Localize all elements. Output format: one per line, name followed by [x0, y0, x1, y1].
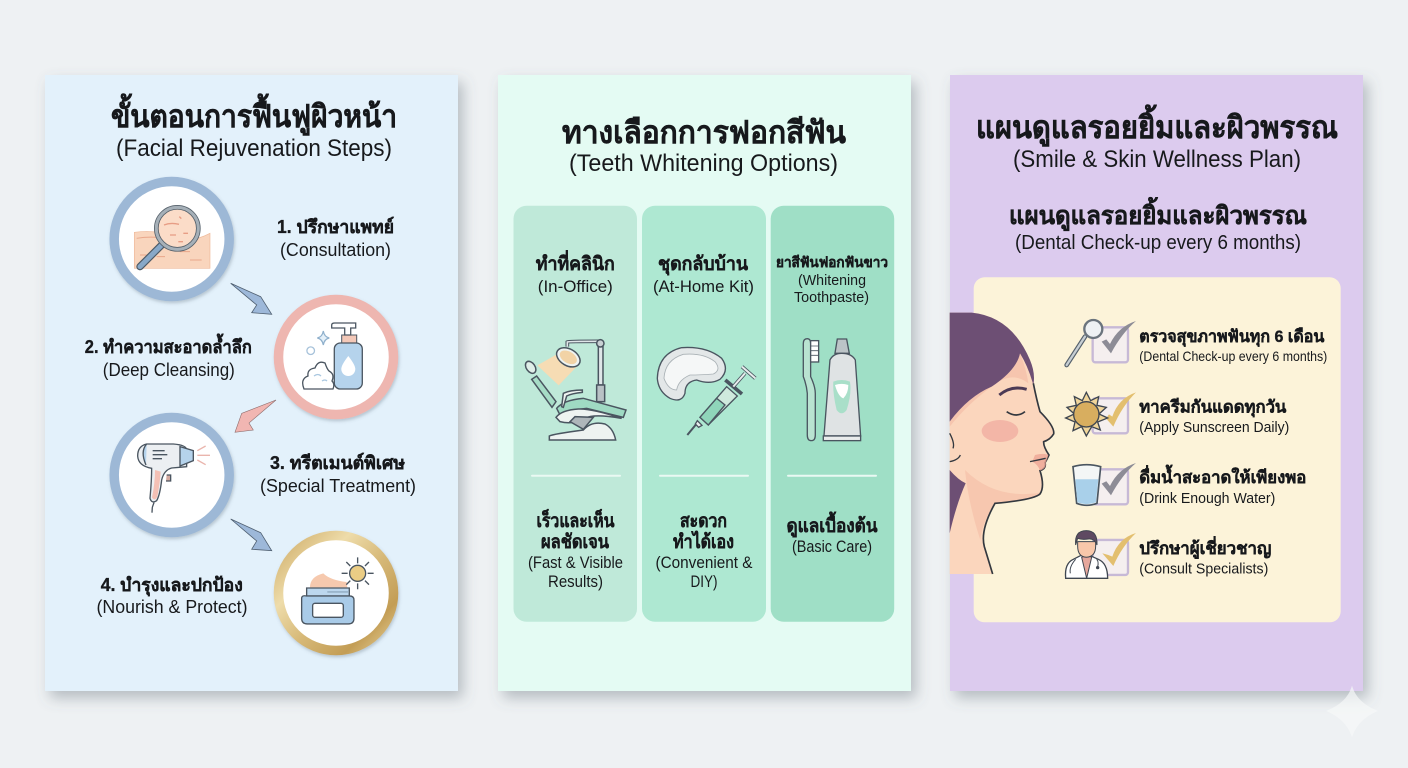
illustration: woman profile [950, 313, 1054, 574]
list item: dental check-up: (Dental Check-up every 6 months) [1139, 348, 1327, 364]
column: in-office: ผลชัดเจน [541, 532, 609, 553]
text: step 4: 4. บำรุงและปกป้อง [101, 575, 243, 597]
list item: sunscreen: ทาครีมกันแดดทุกวัน [1139, 396, 1287, 418]
list item: drink water [1073, 463, 1306, 507]
heading: smile and skin wellness plan: (Smile & Skin Wellness Plan) [1013, 146, 1301, 173]
text: step 3: (Special Treatment) [260, 476, 416, 496]
column: at-home kit: ชุดกลับบ้าน [658, 253, 748, 276]
heading: teeth whitening: ทางเลือกการฟอกสีฟัน [562, 115, 846, 150]
column: at-home kit: (At-Home Kit) [653, 277, 754, 296]
icon: step 3 treatment device [114, 418, 229, 532]
arrow: step 1 to 2 [231, 283, 272, 314]
icon: glass of water with check [1073, 463, 1136, 505]
icon: doctor with check [1065, 531, 1136, 578]
list item: drink water: ดื่มน้ำสะอาดให้เพียงพอ [1139, 464, 1306, 487]
column: in-office: (Fast & Visible [528, 553, 623, 572]
column: whitening toothpaste: Toothpaste) [794, 289, 869, 306]
heading: teeth whitening [562, 115, 846, 177]
column: in-office [514, 206, 637, 622]
icon: sparkle watermark [1328, 688, 1376, 735]
card: wellness checklist [974, 277, 1341, 622]
column: in-office: (In-Office) [538, 277, 613, 296]
text: step 2: 2. ทำความสะอาดล้ำลึก [85, 333, 252, 357]
list item: consult specialists: ปรึกษาผู้เชี่ยวชาญ [1139, 536, 1271, 560]
column: in-office: เร็วและเห็น [536, 508, 614, 532]
arrow: step 3 to 4 [231, 519, 272, 551]
column: in-office: Results) [548, 572, 603, 591]
column: whitening toothpaste: (Whitening [798, 272, 866, 289]
column: whitening toothpaste: ยาสีฟันฟอกฟันขาว [776, 254, 888, 270]
icon: sun with check [1066, 392, 1136, 436]
text: step 4: (Nourish & Protect) [96, 597, 248, 617]
list item: consult specialists [1065, 531, 1271, 578]
column: in-office: ทำที่คลินิก [536, 250, 615, 275]
arrow: step 2 to 3 [235, 400, 276, 432]
panel: smile and skin wellness plan [950, 75, 1363, 691]
column: whitening toothpaste: ดูแลเบื้องต้น [786, 511, 878, 538]
text: step 1 [277, 216, 394, 260]
heading: facial rejuvenation: (Facial Rejuvenation Steps) [116, 135, 392, 162]
icon: step 4 cream jar and sun [278, 536, 394, 650]
text: step 3: 3. ทรีตเมนต์พิเศษ [270, 452, 405, 473]
icon: dental mirror with check [1067, 320, 1136, 365]
list item: sunscreen [1066, 392, 1289, 436]
list item: dental check-up [1067, 320, 1327, 365]
column: at-home kit: (Convenient & [656, 553, 753, 572]
list item: drink water: (Drink Enough Water) [1139, 491, 1275, 507]
text: step 2: (Deep Cleansing) [103, 360, 235, 380]
panel: teeth whitening options [498, 75, 911, 691]
text: step 4 [96, 575, 248, 617]
subheading: dental check-up: แผนดูแลรอยยิ้มและผิวพรรณ [1009, 196, 1307, 232]
column: whitening toothpaste: (Basic Care) [792, 537, 872, 556]
column: whitening toothpaste [771, 206, 894, 622]
heading: smile and skin wellness plan [976, 104, 1338, 173]
text: step 2 [85, 333, 252, 380]
list item: dental check-up: ตรวจสุขภาพฟันทุก 6 เดือน [1139, 326, 1325, 347]
text: step 3 [260, 452, 416, 496]
list item: sunscreen: (Apply Sunscreen Daily) [1139, 420, 1289, 436]
column: at-home kit [642, 206, 766, 622]
column: at-home kit: ทำได้เอง [673, 530, 734, 553]
heading: teeth whitening: (Teeth Whitening Options) [569, 150, 838, 177]
icon: step 1 magnifier on skin [114, 182, 229, 296]
panel: facial rejuvenation steps [45, 75, 458, 691]
heading: smile and skin wellness plan: แผนดูแลรอยยิ้มและผิวพรรณ [976, 104, 1338, 147]
text: step 1: 1. ปรึกษาแพทย์ [277, 216, 394, 237]
icon: dental chair [523, 340, 626, 440]
icon: toothbrush and toothpaste [803, 339, 861, 441]
heading: facial rejuvenation: ขั้นตอนการฟื้นฟูผิวหน้า [111, 93, 397, 136]
icon: whitening tray and syringe [657, 347, 755, 435]
column: at-home kit: DIY) [690, 572, 718, 591]
icon: step 2 pump bottle and foam [278, 300, 394, 414]
text: step 1: (Consultation) [280, 240, 391, 260]
list item: consult specialists: (Consult Specialists) [1139, 562, 1268, 578]
subheading: dental check-up: (Dental Check-up every 6 months) [1015, 232, 1301, 254]
column: at-home kit: สะดวก [680, 511, 727, 532]
heading: facial rejuvenation [111, 93, 397, 162]
subheading: dental check-up [1009, 196, 1307, 254]
